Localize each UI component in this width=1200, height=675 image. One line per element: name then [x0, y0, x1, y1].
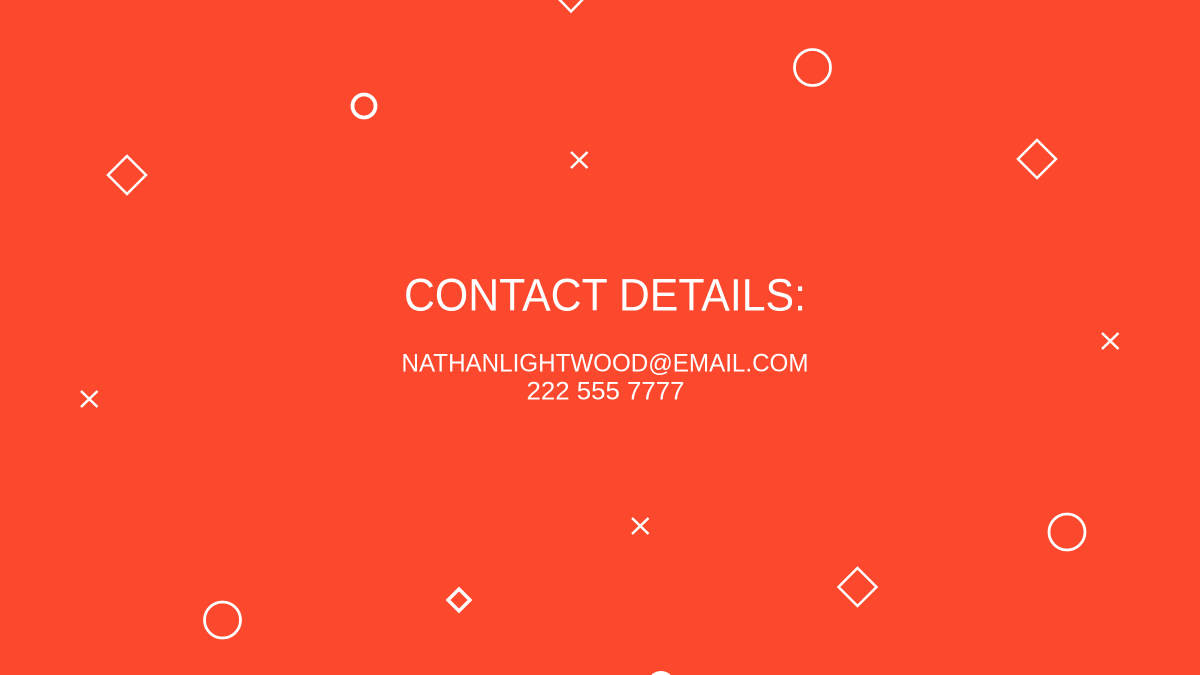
title: CONTACT DETAILS:: [404, 270, 806, 320]
icon: circle top right: [794, 50, 830, 86]
icon: cross bottom centre: [632, 518, 648, 534]
icon: cross top centre: [571, 152, 588, 168]
contact email: NATHANLIGHTWOOD@EMAIL.COM: [402, 350, 808, 378]
icon: small diamond bottom: [448, 589, 470, 611]
contact phone: 222 555 7777: [526, 378, 684, 406]
icon: circle bottom left: [204, 602, 240, 638]
icon: diamond left: [108, 156, 146, 194]
icon: diamond top right: [1018, 140, 1056, 178]
icon: circle cropped at bottom edge: [650, 674, 672, 675]
icon: small circle top left: [352, 94, 376, 118]
icon: cross left: [81, 391, 98, 407]
icon: cross right: [1102, 333, 1118, 349]
icon: diamond cropped at top edge: [556, 0, 586, 12]
icon: diamond bottom right: [838, 568, 876, 606]
icon: circle bottom right: [1049, 514, 1085, 550]
